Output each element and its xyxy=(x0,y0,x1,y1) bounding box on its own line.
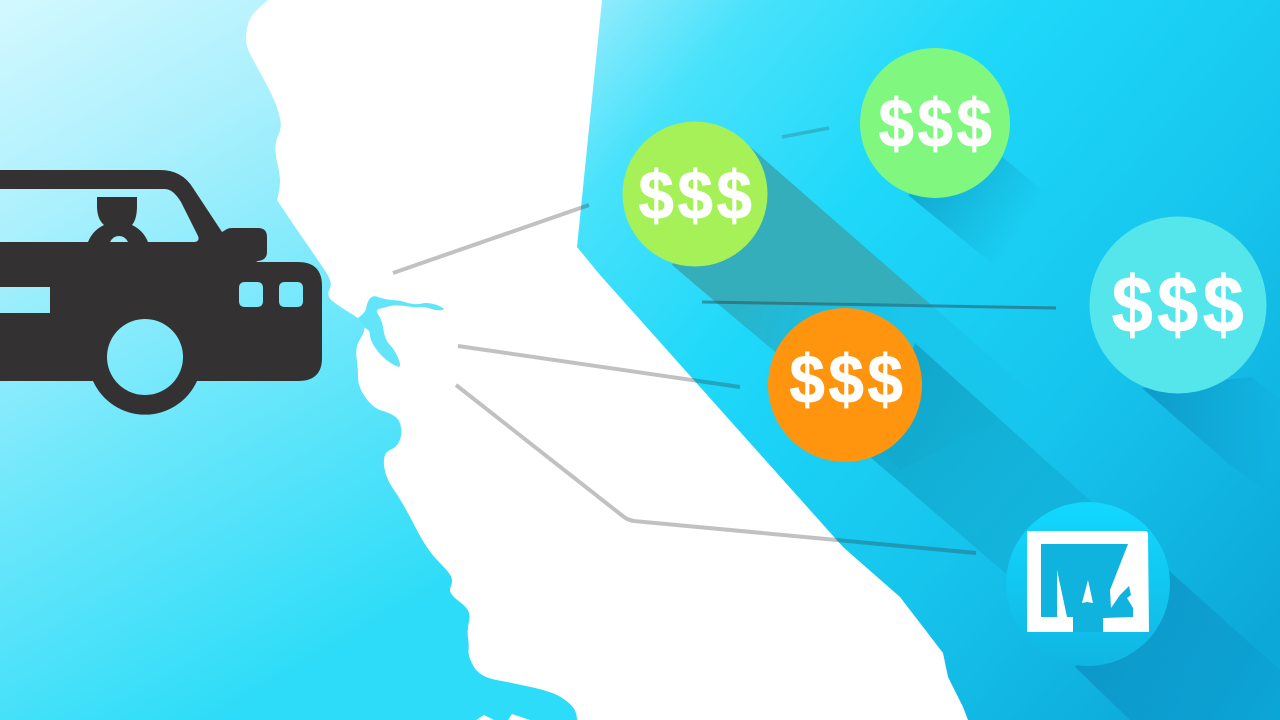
connector lines xyxy=(393,128,1056,553)
map: California coastline xyxy=(246,0,1000,720)
map: bottom islands xyxy=(476,714,530,720)
badge: teal cost circle: $$$ xyxy=(1112,260,1248,350)
badge: logo circle xyxy=(1006,502,1170,666)
badge: teal cost circle xyxy=(1090,216,1266,394)
icon: dark car xyxy=(0,170,322,415)
logo: white box with blue mark xyxy=(1027,531,1149,632)
badge: orange cost circle xyxy=(768,308,922,462)
badge: orange cost circle: $$$ xyxy=(790,342,906,419)
long shadows xyxy=(672,145,1280,720)
badge: green cost circle: $$$ xyxy=(879,86,995,163)
panel: inland blue region xyxy=(577,0,1280,720)
map: San Francisco Bay xyxy=(358,296,444,367)
badge: green cost circle xyxy=(860,48,1010,198)
badge: lime cost circle: $$$ xyxy=(639,158,755,235)
badge: lime cost circle xyxy=(622,122,768,266)
